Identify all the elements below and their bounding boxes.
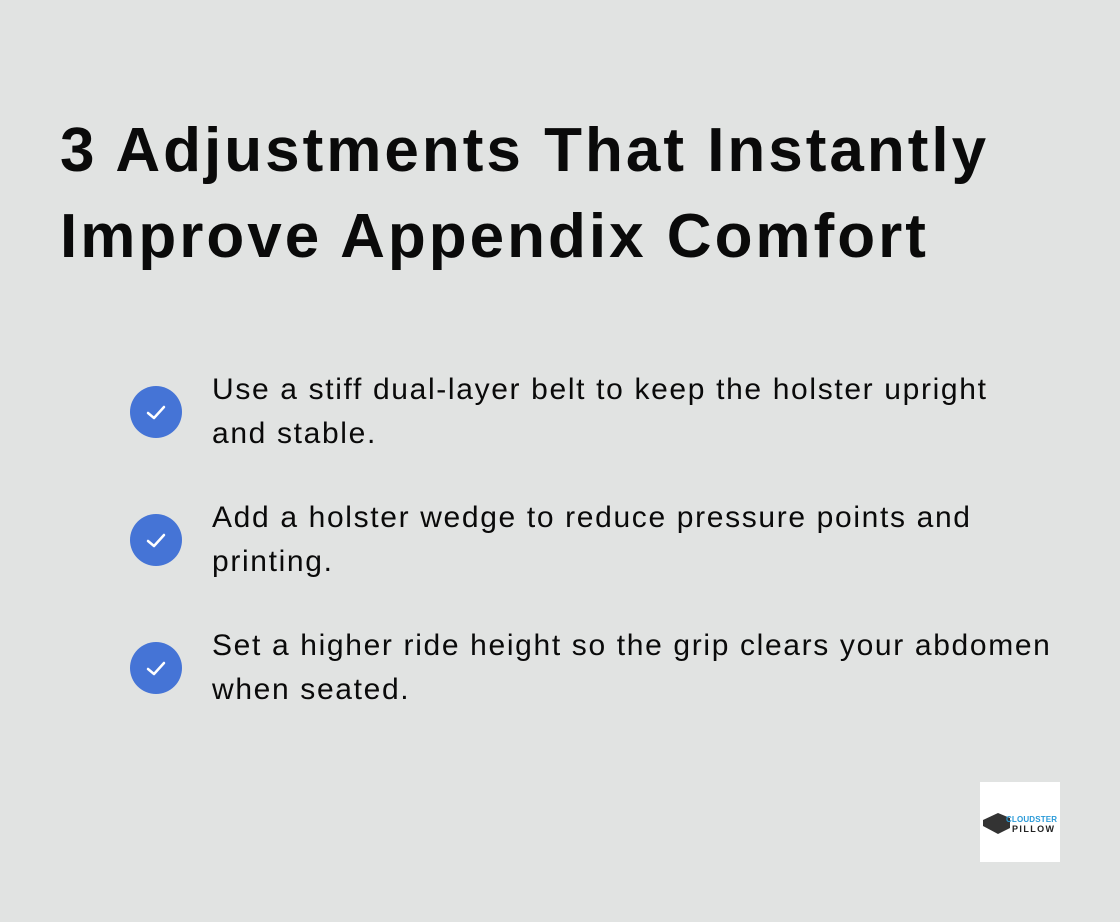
item 3 <box>130 629 1052 706</box>
icon: check <box>130 642 182 694</box>
logo <box>980 782 1060 862</box>
item 1 <box>130 373 988 450</box>
text 2 <box>212 501 972 578</box>
icon: check <box>130 514 182 566</box>
text 3: Set a higher ride height so the grip clears your abdomen <box>212 629 1052 662</box>
icon: check <box>130 386 182 438</box>
title <box>60 116 989 271</box>
text 2: printing. <box>212 545 334 578</box>
text 3 <box>212 629 1052 706</box>
logo: PILLOW <box>1012 824 1054 834</box>
text 1 <box>212 373 988 450</box>
text 1: Use a stiff dual-layer belt to keep the holster upright <box>212 373 988 406</box>
logo: CLOUDSTER <box>1006 815 1057 824</box>
text 1: and stable. <box>212 417 377 450</box>
text 3: when seated. <box>212 673 410 706</box>
item 2 <box>130 501 972 578</box>
title: Improve Appendix Comfort <box>60 202 929 271</box>
title: 3 Adjustments That Instantly <box>60 116 989 185</box>
text 2: Add a holster wedge to reduce pressure points and <box>212 501 972 534</box>
